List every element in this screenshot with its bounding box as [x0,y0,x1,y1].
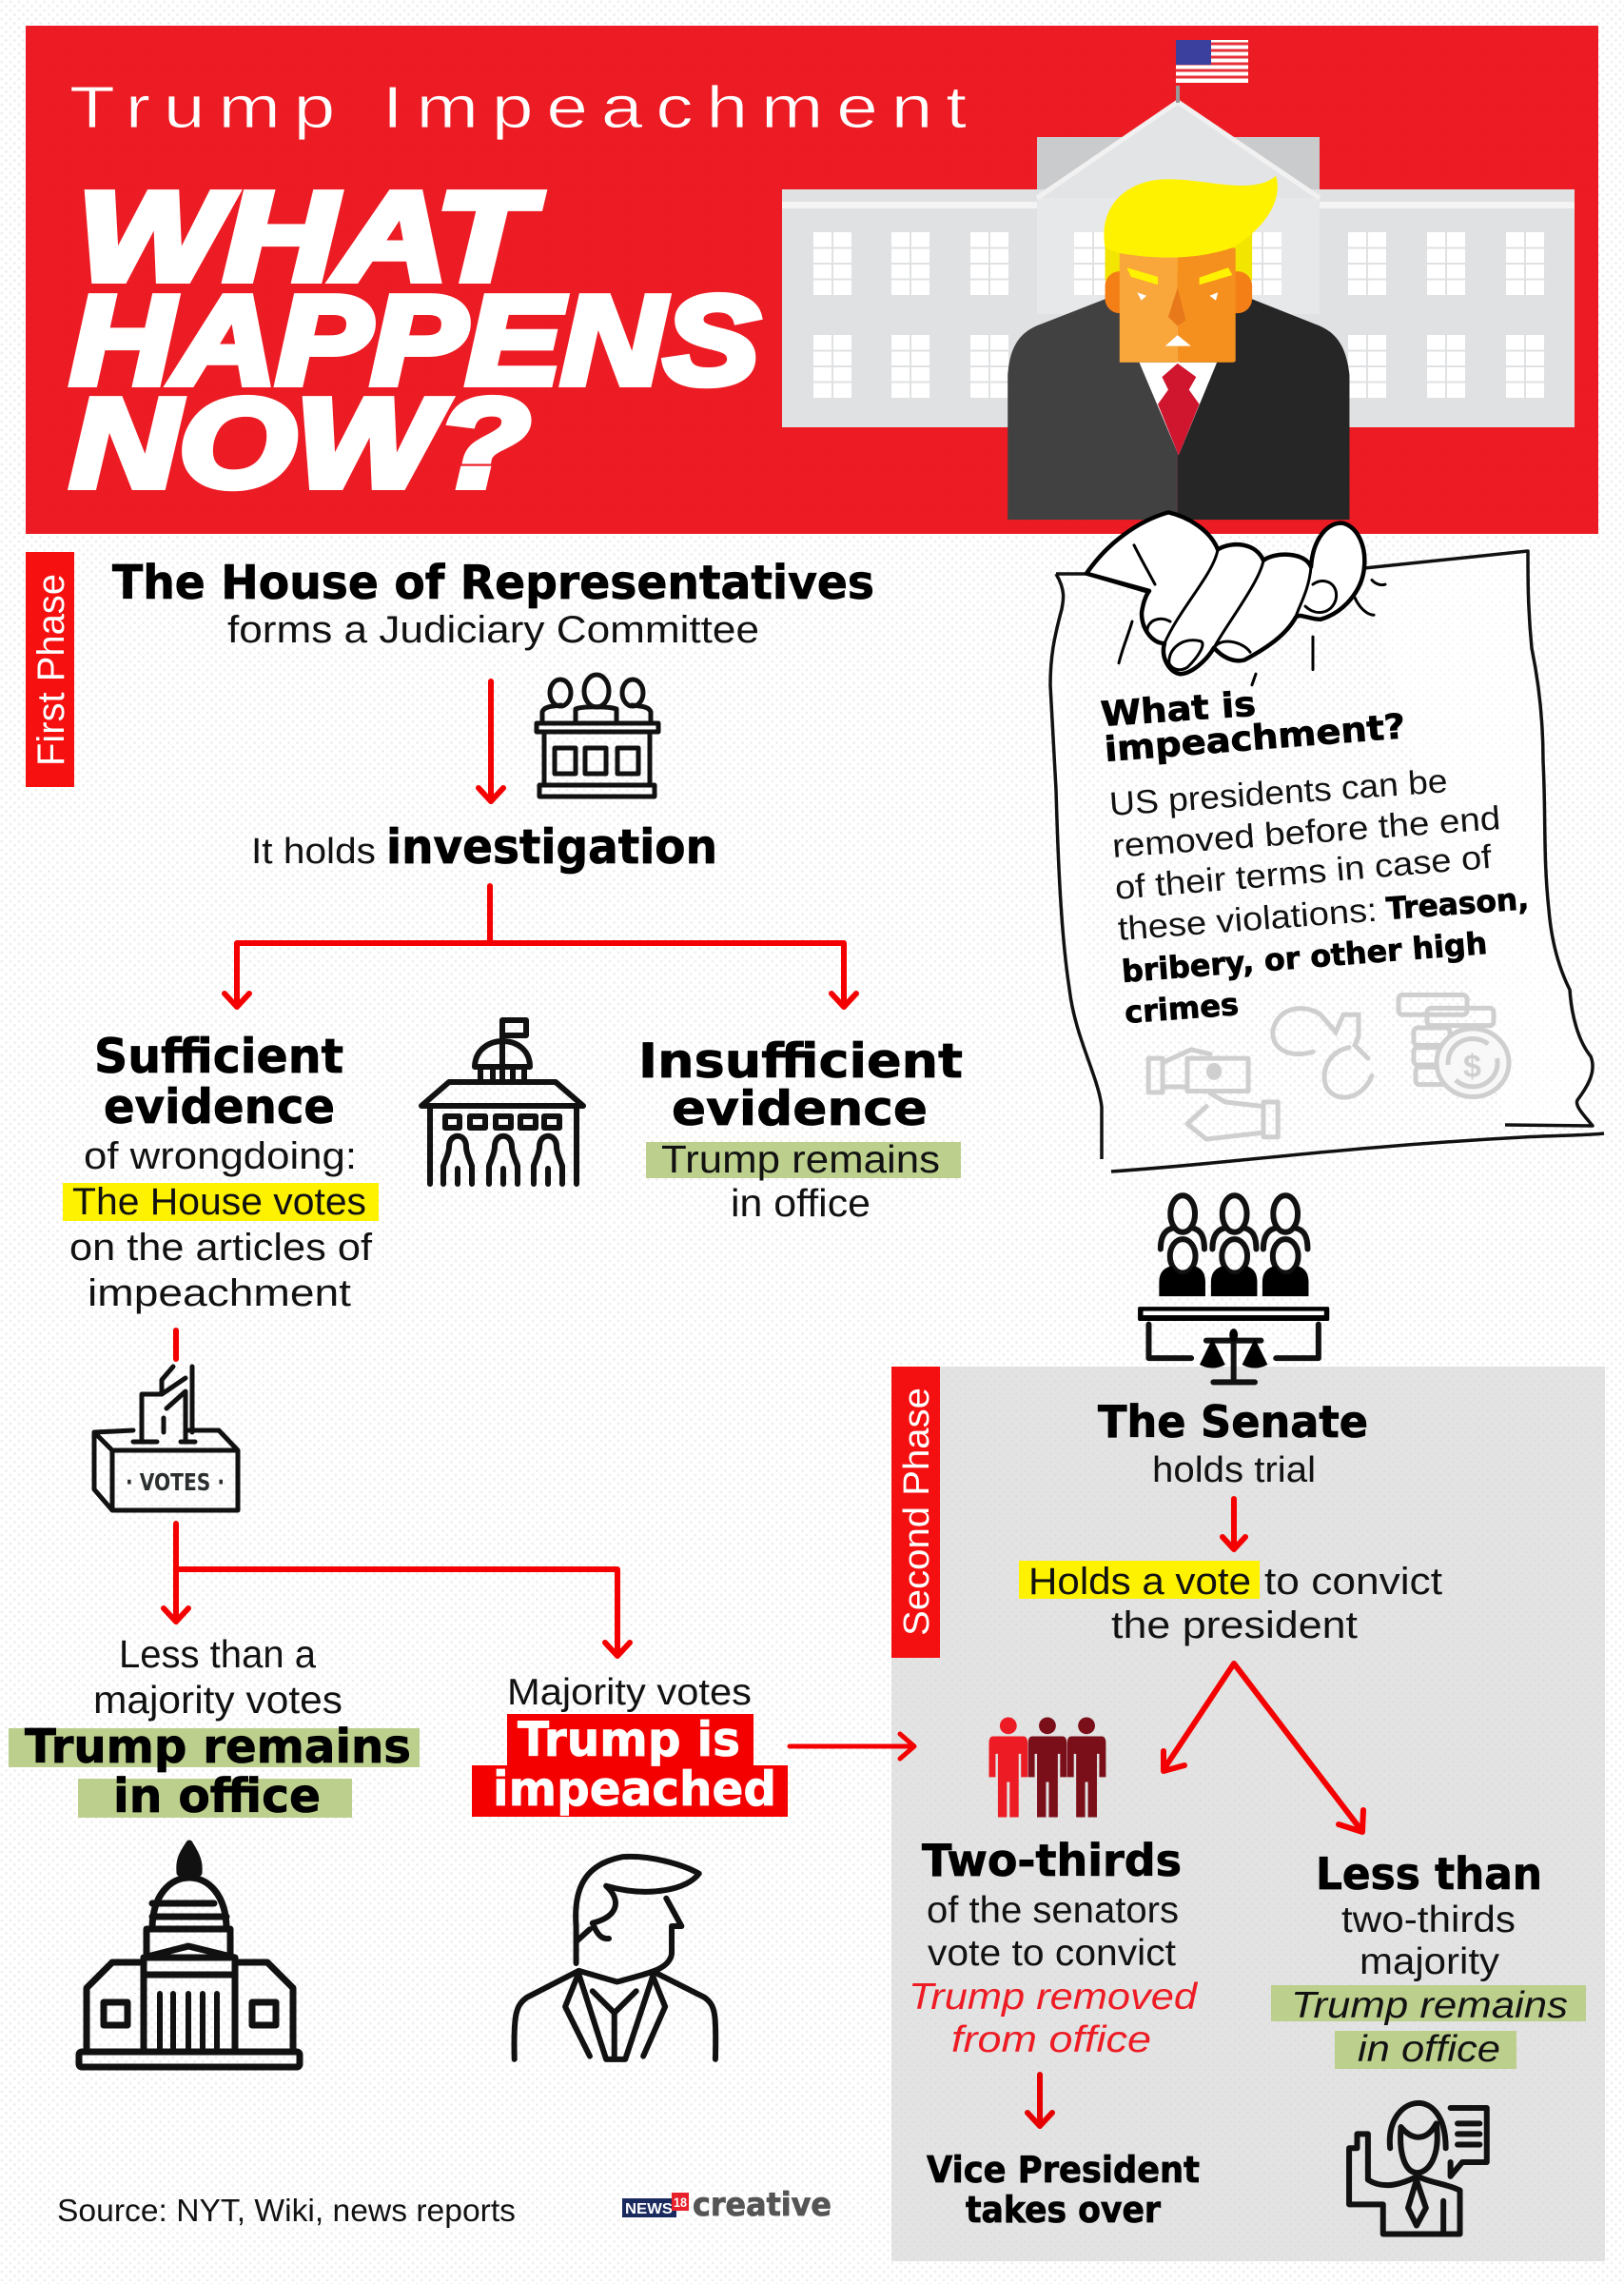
headline: What happens now [70,167,759,513]
arrow: to investigation [479,681,503,801]
text block: Less than two-thirds outcome: two-thirds [1341,1900,1516,1940]
text block: Insufficient evidence: Insufficient [638,1034,963,1089]
arrows: Senate vote outcomes [1164,1664,1363,1832]
text: forms a Judiciary Committee: forms a Judiciary Committee [227,609,759,651]
logo: News18 Creative: creative [693,2186,832,2224]
illustration: Trump caricature [1008,176,1349,520]
source note: Source: NYT, Wiki, news reports [57,2193,516,2228]
text: Vice President takes over: Vice President [927,2149,1200,2191]
text block: Insufficient evidence [638,1034,963,1225]
text: It holds investigation [251,819,717,875]
text: impeachment definition: crimes [1124,986,1240,1031]
text: Vice President takes over [927,2149,1200,2231]
text: Holds a vote to convict the president [1019,1561,1442,1646]
arrow: to vote [1223,1499,1245,1549]
arrow: impeached to Senate [790,1734,914,1759]
heading: What is impeachment: impeachment? [1103,707,1407,770]
text: holds trial: holds trial [1152,1450,1316,1490]
text: Vice President takes over: takes over [966,2189,1161,2231]
heading: What is impeachment: What is [1100,685,1257,735]
text block: Majority votes, Trump is impeached: Trump is [518,1712,740,1767]
text block: Less than two-thirds outcome [1271,1848,1586,2070]
tag: Second Phase [891,1367,940,1658]
heading: What is impeachment [1100,685,1407,770]
icon: coin stack: $ [1463,1049,1481,1085]
arrows: vote outcomes [164,1524,630,1656]
panel: Second Phase [891,1367,1605,2261]
text block: Insufficient evidence: in office [731,1181,871,1225]
icon: Trump line portrait [514,1857,715,2059]
icon: three senators [989,1717,1105,1818]
text block: Two-thirds outcome: Two-thirds [922,1835,1182,1886]
text block: Sufficient evidence: of wrongdoing: [84,1135,357,1177]
tag: Second Phase: Second Phase [897,1388,937,1636]
heading: The Senate: The Senate [1098,1396,1368,1447]
text block: Two-thirds outcome: vote to convict [928,1933,1176,1974]
icon: handcuffs [1273,1009,1372,1097]
text: impeachment definition: of their terms in case of [1113,838,1494,907]
icon: coin stack [1399,995,1509,1097]
illustration: White House [782,86,1575,427]
panel: header banner [26,26,1598,534]
text: impeachment definition: these violations: [1117,892,1379,948]
icon: Capitol building [79,1843,300,2067]
paper sheet outline [1050,551,1604,1172]
icon: bribery hands [1148,1050,1278,1139]
text block: Sufficient evidence: on the articles of [69,1227,373,1269]
text block: Less than a majority: Less than a [119,1632,316,1676]
icon: Senate bench with scales [1138,1195,1329,1382]
text block: Sufficient evidence: evidence [104,1079,335,1134]
text block: Less than a majority: Trump remains [25,1720,411,1774]
text block: Majority votes, Trump is impeached [472,1672,788,1817]
arrow: line to ballot box [173,1330,179,1359]
panel: What is impeachment paper [1050,512,1604,1172]
headline: What happens now: WHAT [78,167,542,306]
text block: Less than a majority [9,1632,420,1823]
text block: Two-thirds outcome: of the senators [927,1890,1179,1931]
text: impeachment definition: bribery, or other high [1121,925,1488,990]
logo: News18 Creative: 18 [674,2195,687,2210]
text block: Sufficient evidence: Sufficient [94,1029,343,1084]
icon: committee bench [537,675,658,797]
icon: House building with members [421,1020,583,1184]
text: It holds investigation: It holds [251,832,376,872]
text block: Insufficient evidence: evidence [672,1081,928,1136]
icon: ballot box: · VOTES · [126,1468,225,1496]
title: Trump Impeachment: Trump Impeachment [69,75,980,141]
text block: Two-thirds outcome: from office [951,2019,1151,2060]
logo: News18 Creative: NEWS [625,2201,673,2217]
text: impeachment definition: removed before the end [1111,799,1501,865]
text: Holds a vote to convict the president: to convict [1264,1561,1442,1603]
text block: Two-thirds outcome: Trump removed [909,1977,1198,2018]
icon: ballot box [94,1367,238,1510]
text block: Sufficient evidence: The House votes [72,1181,366,1223]
heading: The House of Representatives: The House of Representatives [112,556,874,610]
arrows: evidence branches [225,886,856,1007]
text block: Majority votes, Trump is impeached: Majority votes [507,1672,752,1713]
arrow: to Vice President [1027,2075,1052,2126]
text block: Less than two-thirds outcome: Less than [1316,1848,1542,1900]
text block: Less than two-thirds outcome: in office [1358,2029,1500,2070]
logo: News18 Creative [622,2186,832,2224]
text: It holds investigation: investigation [386,819,717,875]
text block: Insufficient evidence: Trump remains [661,1137,940,1181]
text block: Sufficient evidence [63,1029,379,1314]
icon: witness speaking [1349,2103,1487,2234]
text block: Sufficient evidence: impeachment [88,1272,351,1314]
icon: US flag [1176,40,1248,83]
text: Holds a vote to convict the president: Holds a vote [1028,1561,1251,1603]
text: impeachment definition [1108,762,1530,1031]
icon: hand holding the paper [1086,512,1385,685]
text: impeachment definition: US presidents can be [1108,762,1449,823]
text: impeachment definition: Treason, [1385,880,1530,927]
text: Holds a vote to convict the president: the president [1111,1605,1358,1646]
text block: Less than two-thirds outcome: majority [1360,1941,1500,1982]
text block: Less than a majority: in office [113,1769,321,1823]
headline: What happens now: NOW? [70,373,530,513]
text block: Majority votes, Trump is impeached: impeached [493,1762,776,1817]
headline: What happens now: HAPPENS [70,270,759,410]
text block: Less than a majority: majority votes [93,1678,342,1722]
text block: Two-thirds outcome [909,1835,1198,2060]
text block: Less than two-thirds outcome: Trump remains [1291,1985,1568,2026]
tag: First Phase: First Phase [30,574,72,766]
